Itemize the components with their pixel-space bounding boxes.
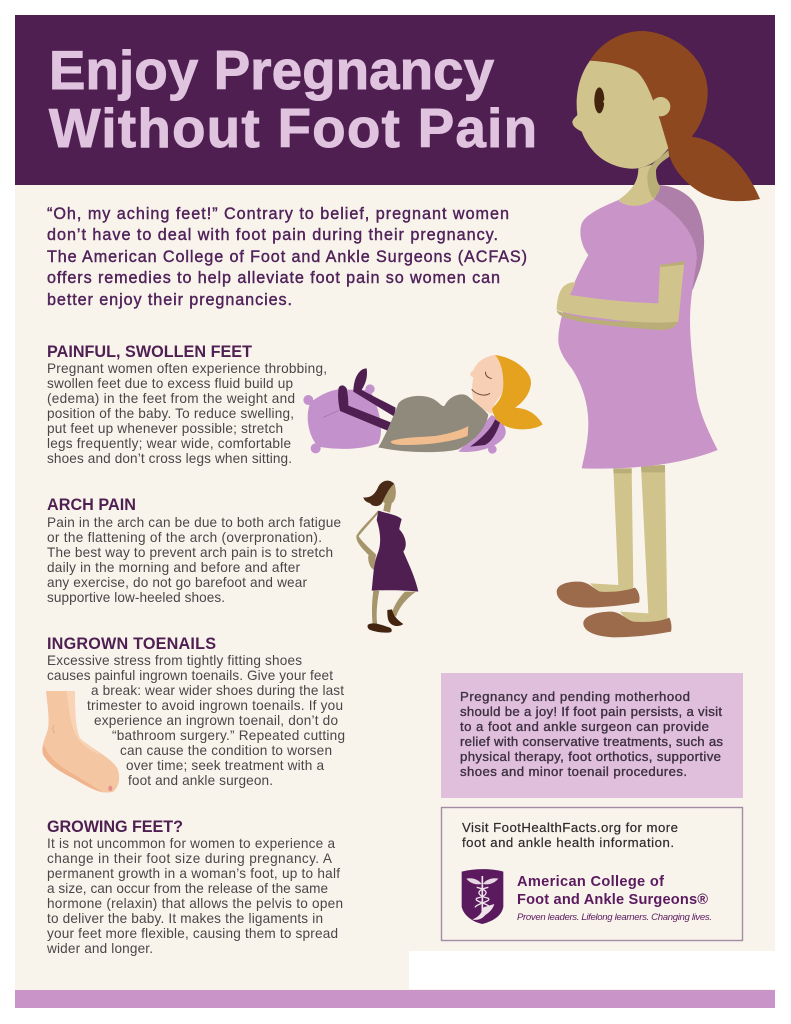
callout: pregnancy and motherhood: Pregnancy and pending motherhood <box>460 689 690 704</box>
section: arch pain: or the flattening of the arch (overpronation). <box>47 530 322 545</box>
panel: website and logo <box>442 808 742 940</box>
footer band <box>15 990 775 1008</box>
section: growing feet: wider and longer. <box>46 941 153 956</box>
section: painful swollen feet <box>47 343 327 466</box>
logo: ACFAS shield <box>462 869 503 924</box>
section: painful swollen feet: legs frequently; wear wide, comfortable <box>47 436 291 451</box>
section: growing feet: a size, can occur from the release of the same <box>47 881 328 896</box>
callout: pregnancy and motherhood: physical therapy, foot orthotics, supportive <box>460 749 721 764</box>
intro text: “Oh, my aching feet!” Contrary to belief, pregnant women <box>47 205 509 223</box>
intro text: The American College of Foot and Ankle Surgeons (ACFAS) <box>47 248 527 266</box>
section: ingrown toenails: “bathroom surgery.” Repeated cutting <box>112 728 345 743</box>
title <box>49 40 537 159</box>
section: arch pain: ARCH PAIN <box>47 496 136 514</box>
logo: organisation name: Proven leaders. Lifelong learners. Changing lives. <box>517 912 712 923</box>
logo: organisation name <box>517 874 712 923</box>
section: growing feet: It is not uncommon for women to experience a <box>47 836 335 851</box>
illustration: standing pregnant woman <box>557 31 760 637</box>
logo: organisation name: Foot and Ankle Surgeons® <box>517 892 708 908</box>
section: ingrown toenails: experience an ingrown toenail, don’t do <box>94 713 338 728</box>
section: painful swollen feet: shoes and don’t cross legs when sitting. <box>47 451 292 466</box>
callout: pregnancy and motherhood: to a foot and ankle surgeon can provide <box>460 719 709 734</box>
illustration: foot <box>42 691 119 793</box>
section: ingrown toenails: INGROWN TOENAILS <box>47 635 216 653</box>
section: ingrown toenails: a break: wear wider shoes during the last <box>91 683 344 698</box>
section: ingrown toenails: foot and ankle surgeon. <box>128 773 273 788</box>
callout: pregnancy and motherhood: should be a joy! If foot pain persists, a visit <box>460 704 722 719</box>
logo: organisation name: American College of <box>517 874 664 890</box>
title: Enjoy Pregnancy <box>49 40 495 101</box>
illustration: walking pregnant woman <box>357 481 418 633</box>
intro text: better enjoy their pregnancies. <box>47 291 292 309</box>
intro text <box>47 205 527 309</box>
section: arch pain: supportive low-heeled shoes. <box>47 590 225 605</box>
section: painful swollen feet: Pregnant women often experience throbbing, <box>47 361 327 376</box>
section: ingrown toenails <box>47 635 345 788</box>
section: growing feet: change in their foot size during pregnancy. A <box>47 851 333 866</box>
section: painful swollen feet: position of the baby. To reduce swelling, <box>47 406 294 421</box>
section: arch pain: The best way to prevent arch pain is to stretch <box>47 545 333 560</box>
title: Without Foot Pain <box>49 98 537 159</box>
section: painful swollen feet: put feet up whenever possible; stretch <box>47 421 283 436</box>
callout: pregnancy and motherhood: shoes and minor toenail procedures. <box>460 764 687 779</box>
section: painful swollen feet: PAINFUL, SWOLLEN FEET <box>47 343 252 361</box>
section: ingrown toenails: trimester to avoid ingrown toenails. If you <box>87 698 343 713</box>
section: painful swollen feet: (edema) in the feet from the weight and <box>47 391 295 406</box>
section: ingrown toenails: causes painful ingrown toenails. Give your feet <box>47 668 333 683</box>
header band <box>15 15 775 185</box>
section: growing feet <box>46 818 343 956</box>
section: growing feet: hormone (relaxin) that allows the pelvis to open <box>47 896 343 911</box>
section: growing feet: permanent growth in a woman’s foot, up to half <box>47 866 340 881</box>
illustration: woman lying with feet raised <box>303 355 543 454</box>
callout: pregnancy and motherhood <box>441 673 743 798</box>
intro text: don’t have to deal with foot pain during their pregnancy. <box>47 226 498 244</box>
section: arch pain: daily in the morning and before and after <box>47 560 300 575</box>
intro text: offers remedies to help alleviate foot pain so women can <box>47 269 500 287</box>
section: ingrown toenails: Excessive stress from tightly fitting shoes <box>47 653 302 668</box>
section: growing feet: to deliver the baby. It makes the ligaments in <box>47 911 323 926</box>
section: ingrown toenails: over time; seek treatment with a <box>126 758 324 773</box>
section: arch pain: any exercise, do not go barefoot and wear <box>47 575 307 590</box>
section: arch pain: Pain in the arch can be due to both arch fatigue <box>47 515 341 530</box>
callout: pregnancy and motherhood: relief with conservative treatments, such as <box>460 734 723 749</box>
panel: website and logo: Visit FootHealthFacts.org for more <box>462 820 678 835</box>
section: ingrown toenails: can cause the condition to worsen <box>120 743 332 758</box>
section: growing feet: your feet more flexible, causing them to spread <box>47 926 338 941</box>
section: growing feet: GROWING FEET? <box>47 818 183 836</box>
panel: website and logo: foot and ankle health information. <box>462 835 674 850</box>
section: arch pain <box>47 496 341 605</box>
section: painful swollen feet: swollen feet due to excess fluid build up <box>47 376 293 391</box>
